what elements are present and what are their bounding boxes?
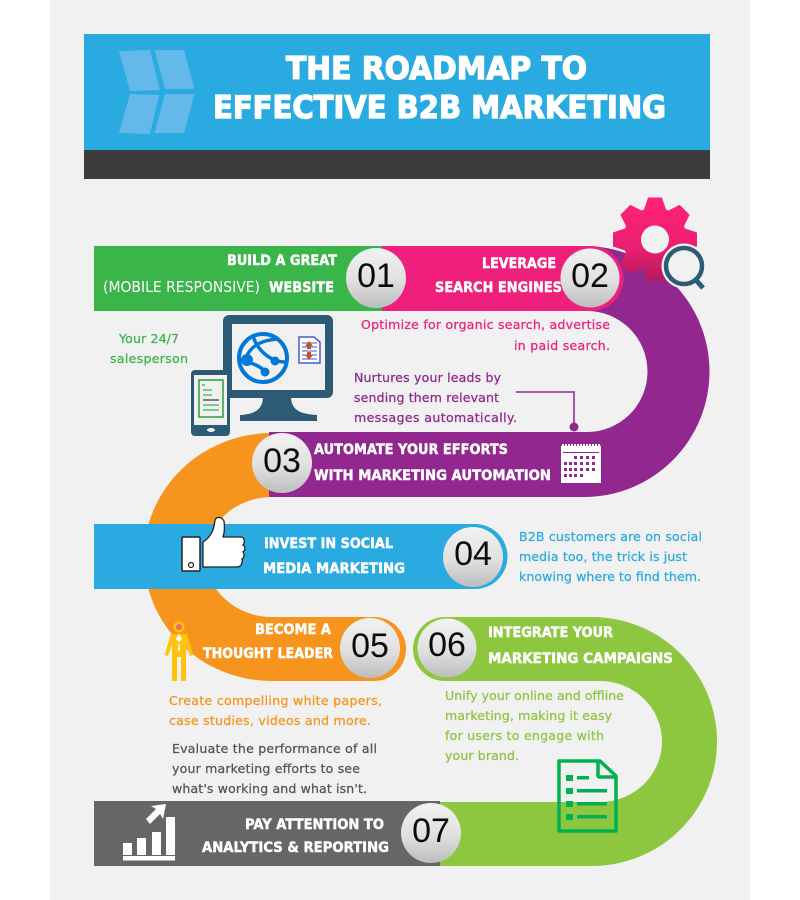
badge 07: [401, 803, 461, 863]
step 02 heading: SEARCH ENGINES: [435, 280, 562, 296]
badge 06: [418, 618, 476, 678]
header banner: [84, 34, 710, 179]
step 01 heading: BUILD A GREAT: [227, 253, 337, 269]
icon: gear: [613, 198, 697, 282]
road curve: purple: [269, 246, 710, 497]
badge 07: 07: [412, 812, 450, 850]
step 04 band: [94, 524, 508, 589]
monitor: [223, 315, 333, 421]
gray description: your marketing efforts to see: [172, 761, 360, 776]
pink description: Optimize for organic search, advertise: [361, 317, 610, 332]
step 01 heading: WEBSITE: [269, 280, 334, 296]
green description: marketing, making it easy: [445, 708, 613, 723]
badge 06: 06: [428, 626, 466, 664]
blue description: knowing where to find them.: [519, 569, 701, 584]
icon: desktop and tablet: [191, 315, 333, 436]
badge 04: [443, 527, 503, 587]
icon: calendar: [561, 446, 601, 483]
badge 05: 05: [351, 627, 389, 665]
badge 03: 03: [263, 442, 301, 480]
step 01 heading: [103, 253, 337, 296]
road curve: light green: [413, 617, 717, 866]
badge 02: 02: [571, 257, 609, 295]
green note: Your 24/7: [118, 331, 179, 346]
step 03 heading: [314, 442, 551, 484]
green description: [445, 688, 624, 763]
step 02 heading: LEVERAGE: [482, 256, 556, 272]
gray description: [172, 741, 377, 796]
orange description: Create compelling white papers,: [169, 693, 382, 708]
step 04 heading: INVEST IN SOCIAL: [264, 536, 393, 552]
step 06 heading: MARKETING CAMPAIGNS: [488, 651, 673, 667]
step 04 heading: [263, 536, 405, 577]
purple description: [354, 370, 517, 425]
step 05 heading: BECOME A: [255, 622, 331, 638]
icon: bar chart with arrow: [123, 804, 175, 860]
pink description: in paid search.: [514, 338, 610, 353]
badge 01: [346, 248, 406, 308]
purple description: messages automatically.: [354, 410, 517, 425]
pink description: [361, 317, 610, 353]
step 05 heading: [203, 622, 333, 662]
green description: your brand.: [445, 748, 519, 763]
green note: [110, 331, 188, 366]
icon: businessman: [164, 622, 193, 681]
step 06 heading: [488, 625, 673, 667]
title: THE ROADMAP TO: [286, 51, 587, 87]
step 03 heading: AUTOMATE YOUR EFFORTS: [314, 442, 508, 458]
icon: thumbs up: [182, 517, 245, 571]
step 03 heading: WITH MARKETING AUTOMATION: [314, 468, 551, 484]
gray description: what's working and what isn't.: [172, 781, 367, 796]
step 02 heading: [435, 256, 562, 296]
badge 04: 04: [454, 535, 492, 573]
orange description: case studies, videos and more.: [169, 713, 371, 728]
badge 05: [340, 618, 400, 678]
step 01 band: [94, 246, 384, 311]
badge 01: 01: [357, 257, 395, 295]
step 07 band: [94, 801, 440, 866]
orange description: [169, 693, 382, 728]
purple description: Nurtures your leads by: [354, 370, 502, 385]
connector line: [516, 392, 578, 432]
icon: chevron logo: [119, 50, 194, 134]
tablet: [191, 370, 230, 436]
blue description: [519, 529, 702, 584]
step 07 heading: ANALYTICS & REPORTING: [202, 840, 389, 856]
title: EFFECTIVE B2B MARKETING: [213, 90, 666, 126]
icon: document list: [559, 761, 616, 831]
title: [213, 51, 666, 126]
step 06 heading: INTEGRATE YOUR: [488, 625, 613, 641]
badge 03: [252, 433, 312, 493]
gray description: Evaluate the performance of all: [172, 741, 377, 756]
blue description: media too, the trick is just: [519, 549, 687, 564]
step 02 band: [382, 246, 624, 311]
badge 02: [560, 248, 620, 308]
step 04 heading: MEDIA MARKETING: [263, 561, 405, 577]
green note: salesperson: [110, 351, 188, 366]
green description: for users to engage with: [445, 728, 604, 743]
icon: magnifier: [662, 244, 706, 288]
purple description: sending them relevant: [354, 390, 499, 405]
green description: Unify your online and offline: [445, 688, 624, 703]
step 07 heading: [202, 817, 389, 856]
step 01 heading: (MOBILE RESPONSIVE): [103, 278, 260, 296]
road curve: orange: [144, 433, 406, 681]
step 05 heading: THOUGHT LEADER: [203, 646, 333, 662]
step 07 heading: PAY ATTENTION TO: [245, 817, 384, 833]
blue description: B2B customers are on social: [519, 529, 702, 544]
